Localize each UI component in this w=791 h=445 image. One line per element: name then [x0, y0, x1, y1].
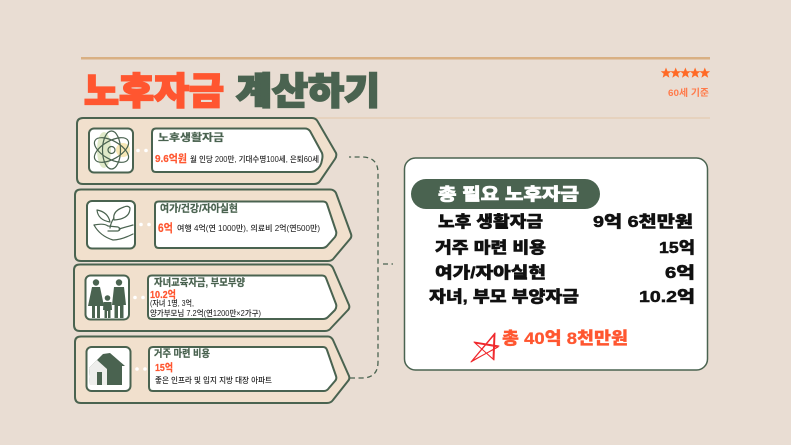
row: self-realization: 여가/자아실현: [435, 264, 546, 282]
row: housing: 15억: [659, 239, 695, 257]
amount and detail: [155, 152, 319, 165]
connector dots: [139, 223, 151, 226]
connector: dashed bracket: [349, 157, 393, 378]
icon: house: [86, 347, 130, 391]
row: dependents: [429, 288, 695, 306]
row: living: 9억 6천만원: [593, 213, 693, 231]
heading pill: 총 필요 노후자금: [438, 185, 579, 204]
panel: total required funds: [404, 158, 708, 370]
amount and detail: 양가부모님 7.2억(연1200만×2가구): [150, 308, 261, 318]
icon: hand-drawn star: [471, 333, 499, 362]
icon: atom: [89, 128, 133, 172]
amount and detail: [150, 289, 261, 318]
row: self-realization: [435, 264, 695, 282]
age basis note: 60세 기준: [668, 87, 709, 99]
connector dots: [136, 149, 148, 152]
heading: 여가/건강/자아실현: [160, 202, 238, 215]
label box: [152, 128, 322, 172]
amount and detail: 6억: [158, 222, 173, 235]
amount and detail: (자녀 1명, 3억,: [150, 298, 194, 308]
label box: [148, 276, 336, 319]
row: self-realization: 6억: [665, 264, 695, 282]
heading: 노후생활자금: [158, 131, 224, 144]
rating stars: [661, 68, 710, 78]
label box: [149, 347, 336, 391]
amount and detail: 9.6억원: [155, 152, 187, 165]
detail: 좋은 인프라 및 입지 지방 대장 아파트: [155, 375, 272, 385]
label box: [155, 202, 336, 248]
title: 계산하기: [236, 71, 380, 112]
row: housing: [435, 239, 695, 257]
heading: 거주 마련 비용: [154, 347, 210, 360]
row: housing: 거주 마련 비용: [435, 239, 546, 257]
panel: leisure and health: [75, 190, 351, 261]
title: [84, 71, 380, 112]
panel: housing: [75, 336, 349, 403]
amount and detail: [158, 222, 320, 235]
connector dots: [135, 367, 147, 371]
icon: hand with sprout: [87, 201, 135, 248]
panel: education and parents: [74, 264, 349, 331]
row: living: 노후 생활자금: [438, 213, 543, 231]
heading: 자녀교육자금, 부모부양: [154, 276, 245, 289]
row: dependents: 10.2억: [639, 288, 695, 306]
amount and detail: 10.2억: [150, 289, 176, 301]
connector dots: [133, 296, 145, 299]
panel: retirement living funds: [77, 118, 336, 184]
heading pill: [411, 179, 600, 209]
amount: 15억: [155, 362, 173, 374]
row: dependents: 자녀, 부모 부양자금: [429, 288, 579, 306]
amount and detail: 월 인당 200만, 기대수명100세, 은퇴60세: [190, 154, 319, 164]
amount and detail: 여행 4억(연 1000만), 의료비 2억(연500만): [177, 223, 320, 233]
total: 총 40억 8천만원: [502, 329, 628, 348]
row: living: [438, 213, 693, 231]
title: 노후자금: [84, 71, 224, 112]
icon: family: [86, 276, 129, 320]
